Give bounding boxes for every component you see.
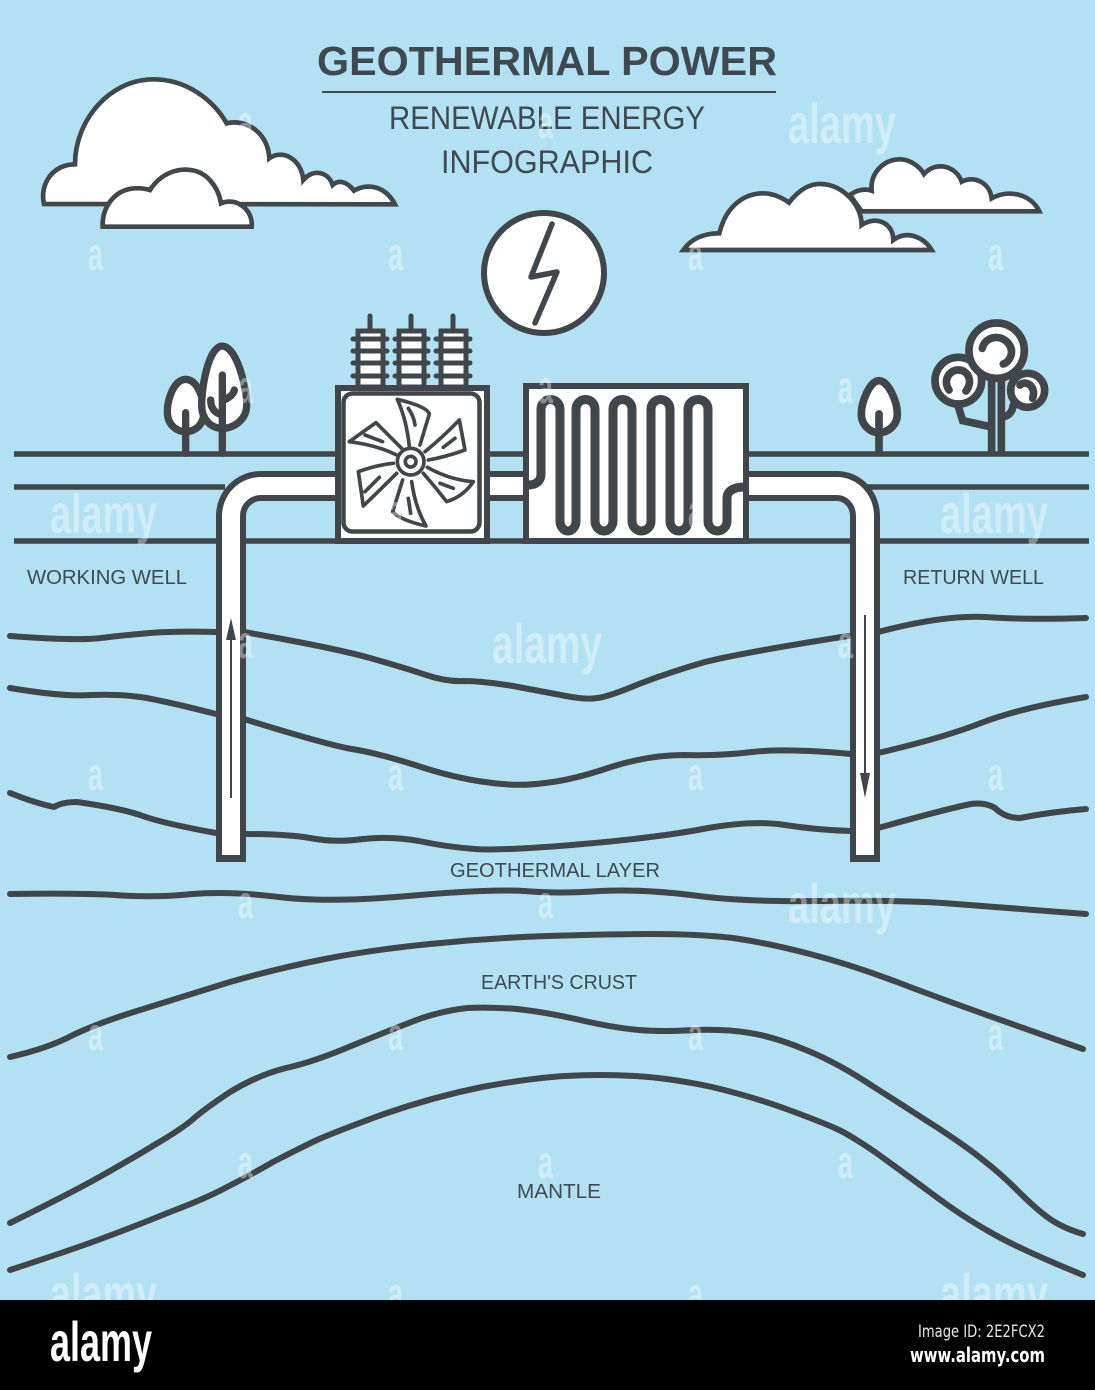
earth strata lines [10, 617, 1086, 1275]
watermarks: a [688, 748, 703, 800]
watermarks: alamy [788, 92, 896, 155]
insulators [353, 316, 470, 387]
watermarks: alamy [788, 872, 896, 935]
label: working well: WORKING WELL [27, 567, 187, 589]
watermarks: alamy [940, 1262, 1048, 1325]
footer image id: Image ID: 2E2FCX2 [918, 1322, 1045, 1342]
watermarks: a [538, 96, 553, 148]
watermarks: a [538, 361, 553, 413]
label: return well: RETURN WELL [903, 567, 1044, 589]
arrow: working well up [226, 618, 236, 798]
watermarks: alamy [492, 612, 602, 675]
watermarks: a [238, 96, 253, 148]
label: earth's crust: EARTH'S CRUST [481, 972, 637, 994]
watermarks: a [388, 228, 403, 280]
title: GEOTHERMAL POWER [317, 38, 777, 84]
watermarks: a [838, 361, 853, 413]
watermarks: a [88, 228, 103, 280]
watermarks: a [388, 1268, 403, 1320]
insulator 2 [395, 316, 428, 387]
icon: electricity circle with lightning bolt [484, 213, 604, 333]
watermarks: a [688, 485, 703, 537]
watermarks: a [838, 616, 853, 668]
watermarks: a [538, 876, 553, 928]
watermarks: a [688, 1008, 703, 1060]
watermarks: a [388, 1008, 403, 1060]
watermarks: a [388, 748, 403, 800]
watermarks: a [388, 485, 403, 537]
watermarks: a [688, 228, 703, 280]
footer logo: alamy [50, 1310, 152, 1373]
watermarks: a [88, 1008, 103, 1060]
watermarks: a [238, 616, 253, 668]
insulator 1 [353, 316, 387, 387]
turbine box with fan [338, 388, 487, 541]
insulator 3 [436, 316, 470, 387]
watermarks: alamy [50, 1262, 157, 1325]
label: mantle: MANTLE [517, 1181, 601, 1203]
watermarks: alamy [50, 482, 157, 545]
watermarks: a [988, 1008, 1003, 1060]
heat exchanger box with coil [526, 386, 746, 541]
ground lines [14, 454, 1089, 541]
icon: right trees [861, 323, 1045, 452]
watermarks: a [238, 361, 253, 413]
watermarks: a [88, 748, 103, 800]
footer url: www.alamy.com [910, 1343, 1045, 1367]
watermarks: a [238, 1136, 253, 1188]
watermarks: a [688, 1268, 703, 1320]
icon: left clouds [43, 79, 395, 227]
well pipes [231, 486, 865, 862]
icon: left trees [167, 346, 247, 453]
watermarks: a [838, 1136, 853, 1188]
label: geothermal layer: GEOTHERMAL LAYER [450, 860, 660, 882]
subtitle line 1: RENEWABLE ENERGY [389, 100, 705, 136]
title block [317, 38, 777, 180]
watermarks: a [988, 228, 1003, 280]
subtitle line 2: INFOGRAPHIC [441, 144, 653, 180]
watermarks: a [538, 1136, 553, 1188]
arrow: return well down [860, 615, 870, 798]
icon: right clouds [683, 159, 1039, 250]
watermarks: a [988, 748, 1003, 800]
footer bar [0, 1300, 1095, 1390]
watermarks: alamy [940, 482, 1048, 545]
watermarks: a [238, 876, 253, 928]
icon: fan blades [349, 399, 473, 526]
